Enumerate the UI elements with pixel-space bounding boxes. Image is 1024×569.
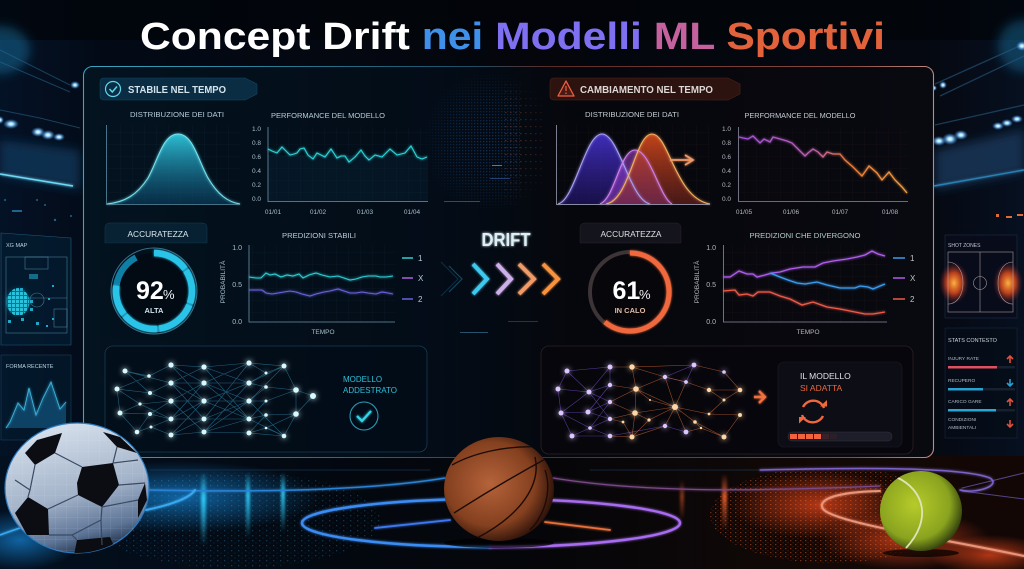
chart: distribuzione stabile bbox=[106, 110, 240, 204]
chart: predizioni stabili: PROBABILITÀ bbox=[218, 260, 227, 303]
chart: predizioni stabili: 0.5 bbox=[232, 282, 242, 289]
light streaks bbox=[201, 472, 727, 546]
side panel: stats contesto: INJURY RATE bbox=[948, 356, 979, 362]
label: modello addestrato: MODELLO bbox=[343, 375, 382, 384]
tennis ball bbox=[880, 471, 962, 557]
basketball bbox=[444, 437, 554, 548]
accuracy gauge: stable bbox=[105, 223, 207, 340]
accuracy gauge: stable: ACCURATEZZA bbox=[128, 230, 189, 239]
chart: performance stabile: 01/04 bbox=[404, 209, 421, 216]
chart: performance stabile: 0.6 bbox=[252, 154, 261, 161]
chart: performance stabile: 01/02 bbox=[310, 209, 327, 216]
panel: neural network trained bbox=[105, 346, 427, 452]
legend: X bbox=[910, 274, 916, 283]
chart: performance drift: 01/05 bbox=[736, 209, 753, 216]
chart: predizioni che divergono: PROBABILITÀ bbox=[692, 260, 701, 303]
chart: performance drift: PERFORMANCE DEL MODELLO bbox=[744, 111, 856, 120]
card: il modello si adatta bbox=[778, 362, 902, 447]
progress bar bbox=[788, 432, 892, 441]
accuracy gauge: stable: ALTA bbox=[145, 306, 164, 315]
icon: sync bbox=[799, 400, 827, 424]
accuracy gauge: stable: 92 bbox=[136, 277, 164, 305]
chart: distribuzione drift bbox=[556, 110, 710, 204]
stat bars bbox=[948, 366, 1015, 412]
accuracy gauge: drift bbox=[580, 223, 681, 332]
chart: performance drift: 01/06 bbox=[783, 209, 800, 216]
side panel: stats contesto bbox=[945, 328, 1017, 438]
chart: predizioni che divergono bbox=[692, 231, 916, 336]
chart: performance stabile: 0.2 bbox=[252, 182, 261, 189]
title: Concept Drift nei Modelli ML Sportivi bbox=[140, 16, 885, 58]
stat arrows bbox=[1007, 356, 1013, 427]
icon: warning bbox=[558, 81, 574, 96]
central world map texture bbox=[425, 75, 545, 333]
accuracy gauge: drift: ACCURATEZZA bbox=[600, 230, 662, 239]
icon: check circle bbox=[106, 82, 120, 96]
chart: performance drift: 0.0 bbox=[722, 196, 731, 203]
side panel: stats contesto: CARICO GARE bbox=[948, 399, 982, 405]
chart: performance drift: 01/08 bbox=[882, 209, 899, 216]
chart: performance drift: 0.6 bbox=[722, 154, 731, 161]
chart: performance drift bbox=[722, 111, 908, 216]
badge label: STABILE NEL TEMPO bbox=[128, 85, 226, 96]
stadium left bbox=[0, 26, 80, 221]
arrow: shift bbox=[670, 155, 693, 165]
legend bbox=[402, 254, 424, 304]
chart: performance stabile: 01/03 bbox=[357, 209, 374, 216]
card: il modello si adatta: IL MODELLO bbox=[800, 371, 851, 381]
side panel: stats contesto: STATS CONTESTO bbox=[948, 338, 998, 344]
card: il modello si adatta: SI ADATTA bbox=[800, 383, 843, 393]
chart: distribuzione stabile: DISTRIBUZIONE DEI DATI bbox=[130, 110, 224, 119]
legend: X bbox=[418, 274, 424, 283]
chart: predizioni stabili: 0.0 bbox=[232, 319, 242, 326]
neural network bbox=[114, 360, 316, 438]
chart: predizioni stabili: TEMPO bbox=[311, 329, 335, 336]
stadium right bbox=[931, 20, 1024, 218]
chart: performance stabile: 0.0 bbox=[252, 196, 261, 203]
drift label and arrows: DRIFT bbox=[482, 230, 530, 250]
court lines bbox=[0, 468, 1024, 556]
soccer ball bbox=[4, 422, 150, 554]
chart: performance drift: 0.8 bbox=[722, 140, 731, 147]
floor bbox=[0, 456, 1024, 569]
chart: distribuzione drift: DISTRIBUZIONE DEI DATI bbox=[585, 110, 679, 119]
chart: predizioni stabili: 1.0 bbox=[232, 245, 242, 252]
icon: check bbox=[350, 402, 378, 430]
chart: performance stabile: PERFORMANCE DEL MODELLO bbox=[271, 111, 385, 120]
accuracy gauge: stable: % bbox=[163, 287, 175, 302]
side panel: forma recente bbox=[1, 355, 71, 440]
label: modello addestrato: ADDESTRATO bbox=[343, 386, 397, 395]
chart: performance stabile: 1.0 bbox=[252, 126, 261, 133]
legend: 2 bbox=[910, 295, 915, 304]
legend: 1 bbox=[418, 254, 423, 263]
chart: performance stabile: 01/01 bbox=[265, 209, 282, 216]
court heat bbox=[939, 252, 1023, 312]
neural network bbox=[556, 363, 765, 440]
legend bbox=[893, 254, 916, 304]
side panel: stats contesto: CONDIZIONI bbox=[948, 417, 976, 423]
drift label and arrows bbox=[441, 230, 558, 296]
side panel: stats contesto: RECUPERO bbox=[948, 378, 975, 384]
chart: performance drift: 0.4 bbox=[722, 168, 731, 175]
legend: 2 bbox=[418, 295, 423, 304]
panel: neural network adapting bbox=[541, 346, 913, 454]
chart: predizioni che divergono: 0.5 bbox=[706, 282, 716, 289]
badge: stabile nel tempo bbox=[100, 78, 257, 100]
side panel: xG map: XG MAP bbox=[6, 243, 28, 249]
badge label: CAMBIAMENTO NEL TEMPO bbox=[580, 85, 713, 96]
chart: predizioni che divergono: PREDIZIONI CHE DIVERGONO bbox=[750, 231, 861, 240]
chart: performance drift: 0.2 bbox=[722, 182, 731, 189]
side panel: shot zones bbox=[939, 235, 1023, 318]
side panel: forma recente: FORMA RECENTE bbox=[6, 364, 54, 370]
chart: predizioni che divergono: TEMPO bbox=[796, 329, 820, 336]
chart: predizioni stabili bbox=[218, 231, 424, 336]
chart: performance stabile: 0.4 bbox=[252, 168, 261, 175]
side panel: shot zones: SHOT ZONES bbox=[948, 243, 981, 249]
side panel: xG map bbox=[1, 233, 71, 345]
side panel: stats contesto: AMBIENTALI bbox=[948, 425, 976, 431]
accuracy gauge: drift: IN CALO bbox=[615, 306, 646, 315]
arrow bbox=[754, 391, 765, 403]
chart: predizioni stabili: PREDIZIONI STABILI bbox=[282, 231, 356, 240]
chart: predizioni che divergono: 0.0 bbox=[706, 319, 716, 326]
chart: predizioni che divergono: 1.0 bbox=[706, 245, 716, 252]
pitch bbox=[6, 257, 67, 333]
chart: performance stabile: 0.8 bbox=[252, 140, 261, 147]
panel: main dashboard bbox=[84, 66, 934, 458]
chart: performance stabile bbox=[252, 111, 428, 216]
accuracy gauge: drift: % bbox=[639, 287, 651, 302]
legend: 1 bbox=[910, 254, 915, 263]
badge: cambiamento nel tempo bbox=[550, 78, 740, 100]
chart: performance drift: 1.0 bbox=[722, 126, 731, 133]
accuracy gauge: drift: 61 bbox=[612, 277, 640, 305]
chart: performance drift: 01/07 bbox=[832, 209, 849, 216]
